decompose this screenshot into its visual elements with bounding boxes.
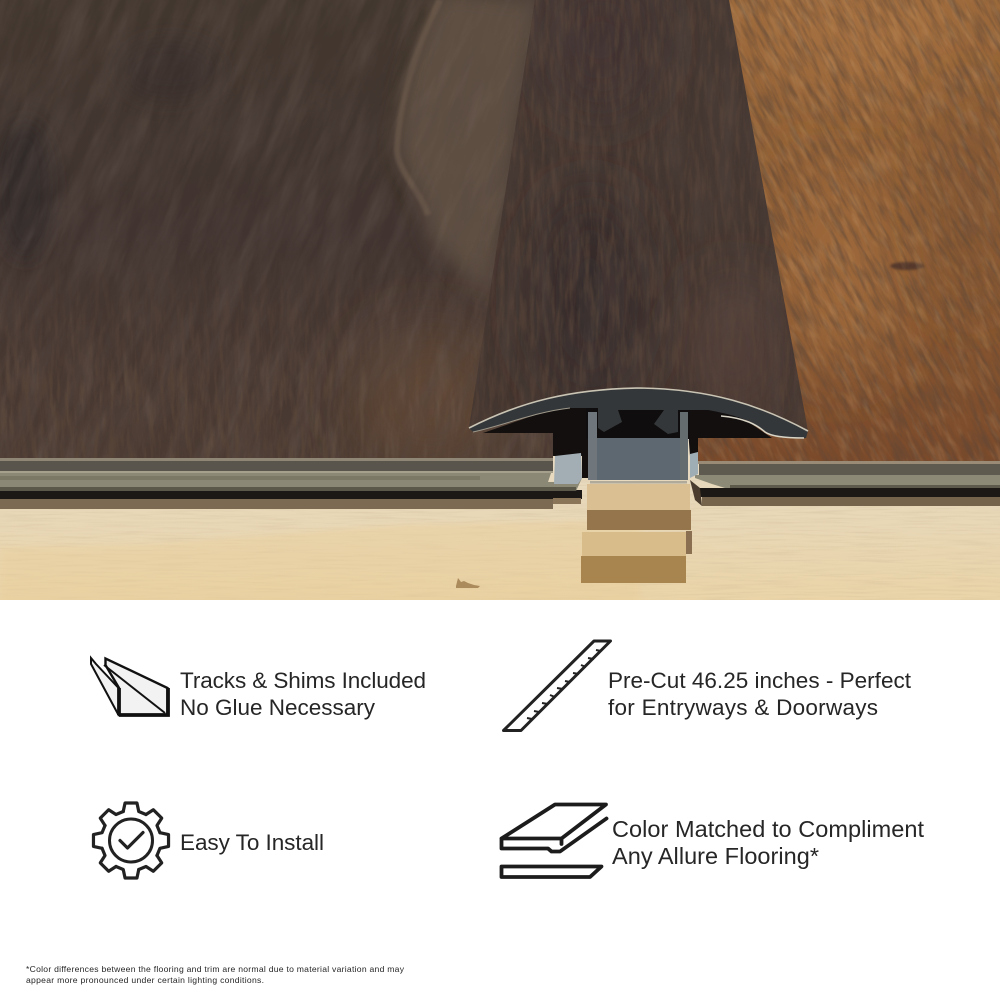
trim cross-section profile: [469, 388, 808, 438]
text: easy to install: Easy To Install: [180, 830, 324, 855]
feature: easy to install: [93, 803, 324, 878]
left dark plank surface: [0, 0, 553, 458]
shadows under planks: [0, 480, 1000, 509]
text: color matched: [612, 816, 924, 869]
text: color matched: Any Allure Flooring*: [612, 843, 819, 869]
stacked shims: [581, 484, 692, 583]
icon: plank and trim boards: [502, 804, 606, 877]
right plank edge profile: [695, 461, 1000, 488]
text: pre-cut length: for Entryways & Doorways: [608, 695, 878, 720]
text: color matched: Color Matched to Compliment: [612, 816, 924, 842]
left plank edge profile: [0, 458, 582, 491]
footnote: [26, 964, 405, 985]
dark cavity under trim: [483, 400, 772, 484]
feature: pre-cut length: [504, 641, 912, 730]
text: tracks and shims: No Glue Necessary: [180, 695, 376, 720]
icon: gear with check mark: [93, 803, 169, 878]
trim top face: [460, 0, 820, 440]
photo: flooring transition trim: [0, 0, 1000, 600]
feature: tracks and shims: [91, 658, 426, 720]
subfloor plywood: [0, 440, 1000, 600]
footnote: appear more pronounced under certain lighting conditions.: [26, 975, 264, 985]
feature: color matched: [502, 804, 924, 877]
right orange plank surface: [697, 0, 1000, 461]
text: tracks and shims: [180, 668, 426, 720]
icon: ruler trim piece: [504, 641, 610, 730]
text: pre-cut length: [608, 668, 912, 720]
metal track: [588, 412, 688, 484]
footnote: *Color differences between the flooring and trim are normal due to material variation and may: [26, 964, 405, 974]
text: pre-cut length: Pre-Cut 46.25 inches - Perfect: [608, 668, 912, 693]
icon: track profile: [91, 658, 168, 715]
text: tracks and shims: Tracks & Shims Included: [180, 668, 426, 693]
